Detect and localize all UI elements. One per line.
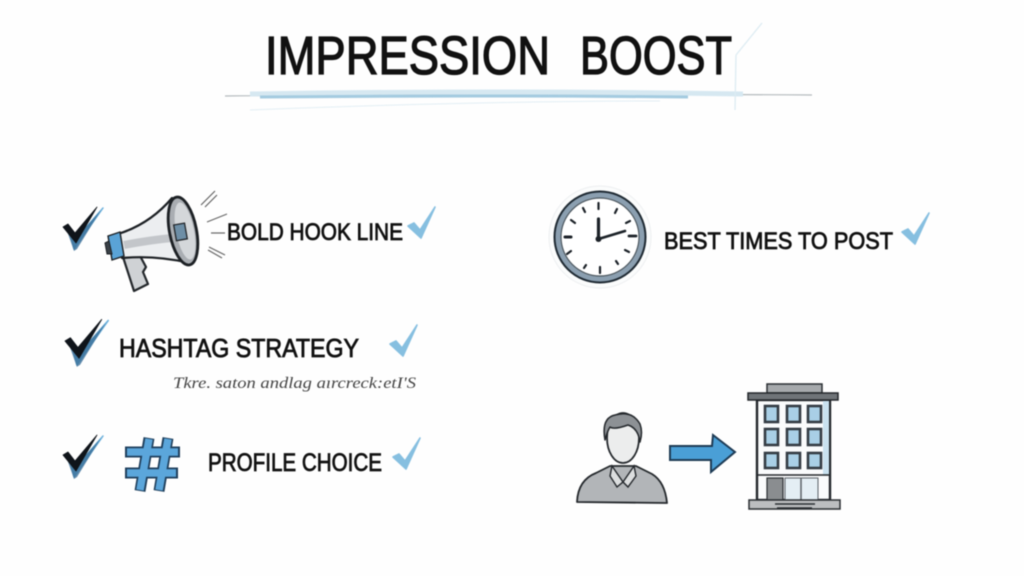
clock ticks — [565, 203, 636, 273]
check: hashtag right — [390, 325, 417, 356]
clock hands — [598, 219, 625, 239]
building steps — [749, 500, 840, 509]
label: best times to post: BEST TIMES TO POST — [664, 228, 893, 255]
sound lines — [201, 191, 227, 258]
icon: megaphone — [105, 191, 227, 291]
icon: person — [577, 413, 667, 503]
icon: building — [748, 384, 840, 509]
label: bold hook line: BOLD HOOK LINE — [227, 219, 403, 246]
check: profile right — [393, 438, 420, 469]
icon: hash — [125, 438, 180, 491]
check: bold hook left — [63, 207, 103, 251]
megaphone handle — [123, 254, 148, 291]
megaphone bell — [163, 195, 203, 267]
check: hashtag left — [65, 319, 108, 367]
building windows — [765, 406, 821, 468]
check: bold hook right — [408, 207, 435, 238]
label: hashtag strategy: HASHTAG STRATEGY — [119, 333, 359, 363]
building entrance — [767, 478, 783, 500]
caption: Tkre. saton andlag aırcreck:etI'S — [173, 375, 416, 392]
check: best times right — [902, 213, 929, 244]
icon: clock — [549, 186, 651, 288]
title underline — [225, 23, 812, 110]
megaphone cone — [118, 198, 190, 263]
label: profile choice: PROFILE CHOICE — [208, 449, 382, 477]
title: IMPRESSION — [265, 26, 550, 86]
arrow: person to building — [670, 435, 735, 472]
check: profile left — [63, 435, 103, 479]
title: BOOST — [580, 26, 732, 86]
megaphone band — [108, 232, 124, 260]
